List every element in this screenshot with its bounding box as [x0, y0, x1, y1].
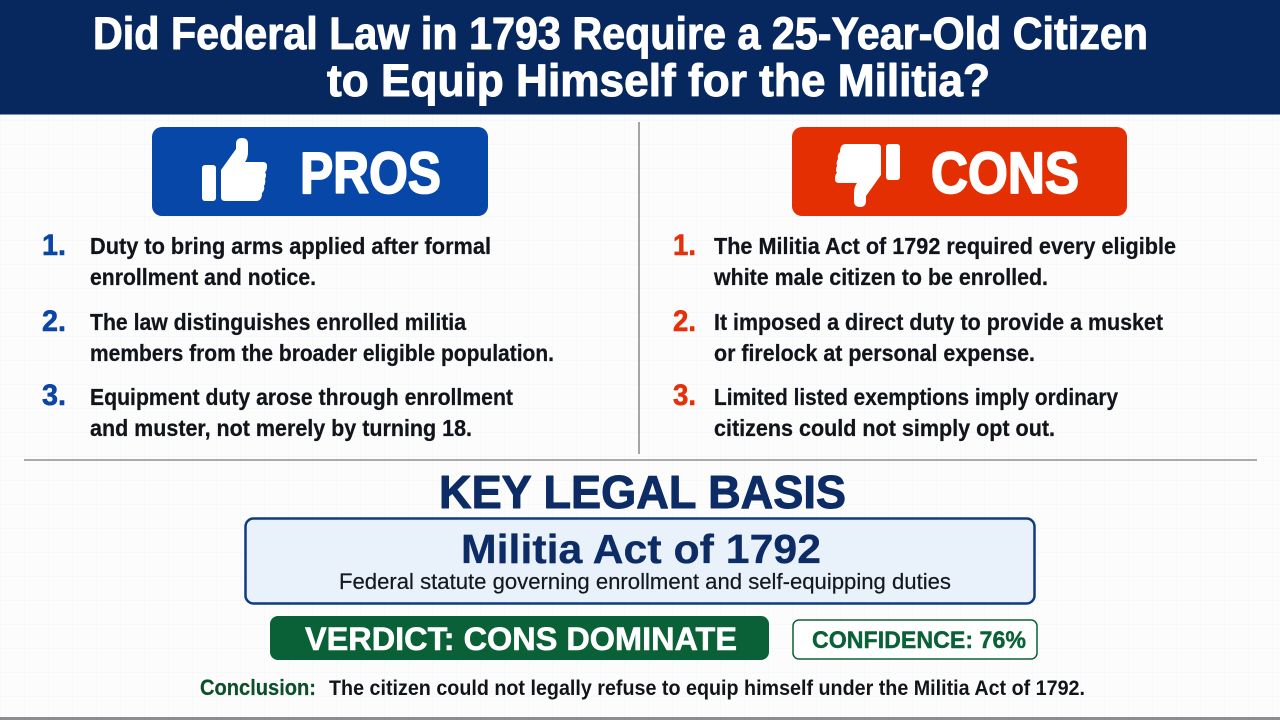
pros item 1: 1.: [42, 229, 66, 262]
verdict badge: VERDICT: CONS DOMINATE: [305, 621, 737, 657]
pros item 3: 3.: [42, 379, 66, 412]
pros item 3: Equipment duty arose through enrollment: [90, 384, 513, 410]
pros item 1: [42, 229, 491, 290]
pros item 2: members from the broader eligible population.: [90, 340, 554, 366]
cons item 1: 1.: [673, 229, 696, 262]
pros item 2: The law distinguishes enrolled militia: [90, 309, 466, 335]
cons header: CONS: [931, 141, 1079, 206]
panel: legal basis card: Federal statute governing enrollment and self-equipping duties: [339, 569, 951, 594]
cons item 1: The Militia Act of 1792 required every eligible: [714, 233, 1176, 259]
pros item 3: and muster, not merely by turning 18.: [90, 415, 472, 441]
panel: cons: [673, 127, 1176, 441]
pros item 1: Duty to bring arms applied after formal: [90, 233, 491, 259]
cons header: [792, 127, 1127, 216]
cons item 3: citizens could not simply opt out.: [714, 415, 1055, 441]
cons item 2: 2.: [673, 305, 696, 338]
confidence badge: [793, 620, 1037, 659]
pros header: PROS: [300, 141, 441, 206]
conclusion: Conclusion:: [200, 675, 316, 700]
title banner: [0, 0, 1280, 114]
pros header: [152, 127, 488, 216]
cons item 2: It imposed a direct duty to provide a musket: [714, 309, 1163, 335]
cons item 2: or firelock at personal expense.: [714, 340, 1035, 366]
panel: legal basis card: [246, 518, 1034, 604]
title banner: Did Federal Law in 1793 Require a 25-Year-Old Citizen: [93, 8, 1148, 59]
pros item 2: 2.: [42, 305, 66, 338]
cons item 1: [673, 229, 1176, 290]
verdict badge: [270, 616, 769, 660]
cons item 3: 3.: [673, 379, 696, 412]
cons item 1: white male citizen to be enrolled.: [713, 264, 1048, 290]
heading: key legal basis: KEY LEGAL BASIS: [439, 466, 846, 518]
icon: thumbs up: [202, 138, 267, 201]
pros item 1: enrollment and notice.: [90, 264, 316, 290]
icon: thumbs down: [835, 144, 900, 207]
pros item 3: [42, 379, 513, 441]
confidence badge: CONFIDENCE: 76%: [812, 627, 1026, 654]
pros item 2: [42, 305, 554, 366]
conclusion: The citizen could not legally refuse to equip himself under the Militia Act of 1792.: [329, 677, 1085, 700]
panel: legal basis card: Militia Act of 1792: [461, 526, 821, 572]
cons item 2: [673, 305, 1163, 366]
cons item 3: Limited listed exemptions imply ordinary: [714, 384, 1118, 410]
cons item 3: [673, 379, 1118, 441]
title banner: to Equip Himself for the Militia?: [327, 55, 990, 106]
panel: pros: [42, 127, 554, 441]
